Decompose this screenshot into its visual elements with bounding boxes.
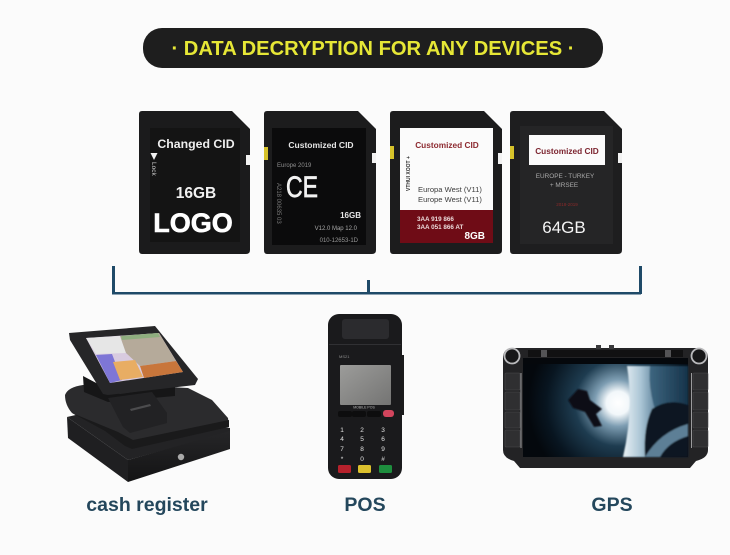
SD card: Customized CID Europa West 8GB: 3AA 919 866 [417,216,454,223]
SD card: Customized CID CE 16GB: Europe 2019 [277,163,312,169]
function keys [338,411,352,417]
SD card: Customized CID 64GB: 64GB [542,218,586,237]
SD card: Changed CID 16GB: LOGO [153,208,233,238]
SD card: Customized CID 64GB: + MRSEE [550,182,578,189]
SD card: Customized CID Europa West 8GB: Europe West (V11) [418,195,482,204]
SD card: Changed CID 16GB: Lock [150,162,157,176]
SD card: Customized CID Europa West 8GB: VTHUI XOOT + [406,156,412,191]
keypad: 0 [360,456,364,463]
SD card: Customized CID CE 16GB: Customized CID [288,140,354,150]
screen bezel [69,326,198,395]
SD card: Customized CID Europa West 8GB: 8GB [464,231,485,242]
keypad: 5 [360,436,364,443]
keypad: 3 [381,427,385,434]
device: cash register [65,326,230,482]
coloured keys [338,465,351,473]
SD card: Customized CID Europa West 8GB: 3AA 051 866 AT [417,224,463,231]
keypad: 8 [360,446,364,453]
SD card: Customized CID 64GB: 2018-2019 [556,202,578,207]
keypad [340,427,385,463]
silver side trim [520,373,522,448]
keypad: 1 [340,427,344,434]
register body [65,385,229,449]
keypad: * [341,456,344,463]
SD card: Customized CID Europa West 8GB: Europa West (V11) [418,185,482,194]
SD card: Customized CID Europa West 8GB [390,111,502,254]
SD card: Customized CID 64GB: Customized CID [535,146,599,156]
SD card: Customized CID 64GB [510,111,622,254]
SD card: Customized CID 64GB: EUROPE - TURKEY [536,173,595,180]
printer lid [342,319,389,339]
keypad: # [381,456,385,463]
knobs [504,348,520,364]
LCD screen [340,365,391,405]
device: POS terminal: MS21 [339,354,350,359]
side buttons [505,373,708,447]
SD card: Customized CID Europa West 8GB: Customized CID [415,140,479,150]
screen stand [83,376,175,402]
touch screen [86,333,183,383]
top slot [528,350,683,357]
SD card: Customized CID CE 16GB: V12.0 Map 12.0 [315,226,358,232]
SD card: Changed CID 16GB: 16GB [176,185,216,202]
device: GPS head unit [503,345,708,468]
SD card: Changed CID 16GB: Changed CID [157,137,235,151]
cash drawer [67,414,230,460]
SD card: Customized CID CE 16GB: 16GB [340,211,361,220]
SD card: Customized CID CE 16GB: CE [286,171,318,204]
label: POS: POS [344,494,386,516]
title banner: · DATA DECRYPTION FOR ANY DEVICES · [172,38,574,60]
keypad: 9 [381,446,385,453]
label: GPS: GPS [591,494,633,516]
keypad: 7 [340,446,344,453]
keypad: 6 [381,436,385,443]
device: POS terminal: MOBILE POS [353,406,375,410]
keypad: 4 [340,436,344,443]
SD card: Customized CID CE 16GB: A218 00635 03 [275,183,281,224]
device: POS terminal [328,314,404,479]
keypad: 2 [360,427,364,434]
SD card: Customized CID CE 16GB [264,111,376,254]
screen image [523,358,688,457]
connector bracket [112,266,642,294]
SD card: Customized CID CE 16GB: 010-12653-1D [320,238,359,244]
label: cash register: cash register [86,494,208,516]
SD card: Changed CID 16GB [139,111,250,254]
title banner [143,28,603,68]
printer [108,392,167,433]
